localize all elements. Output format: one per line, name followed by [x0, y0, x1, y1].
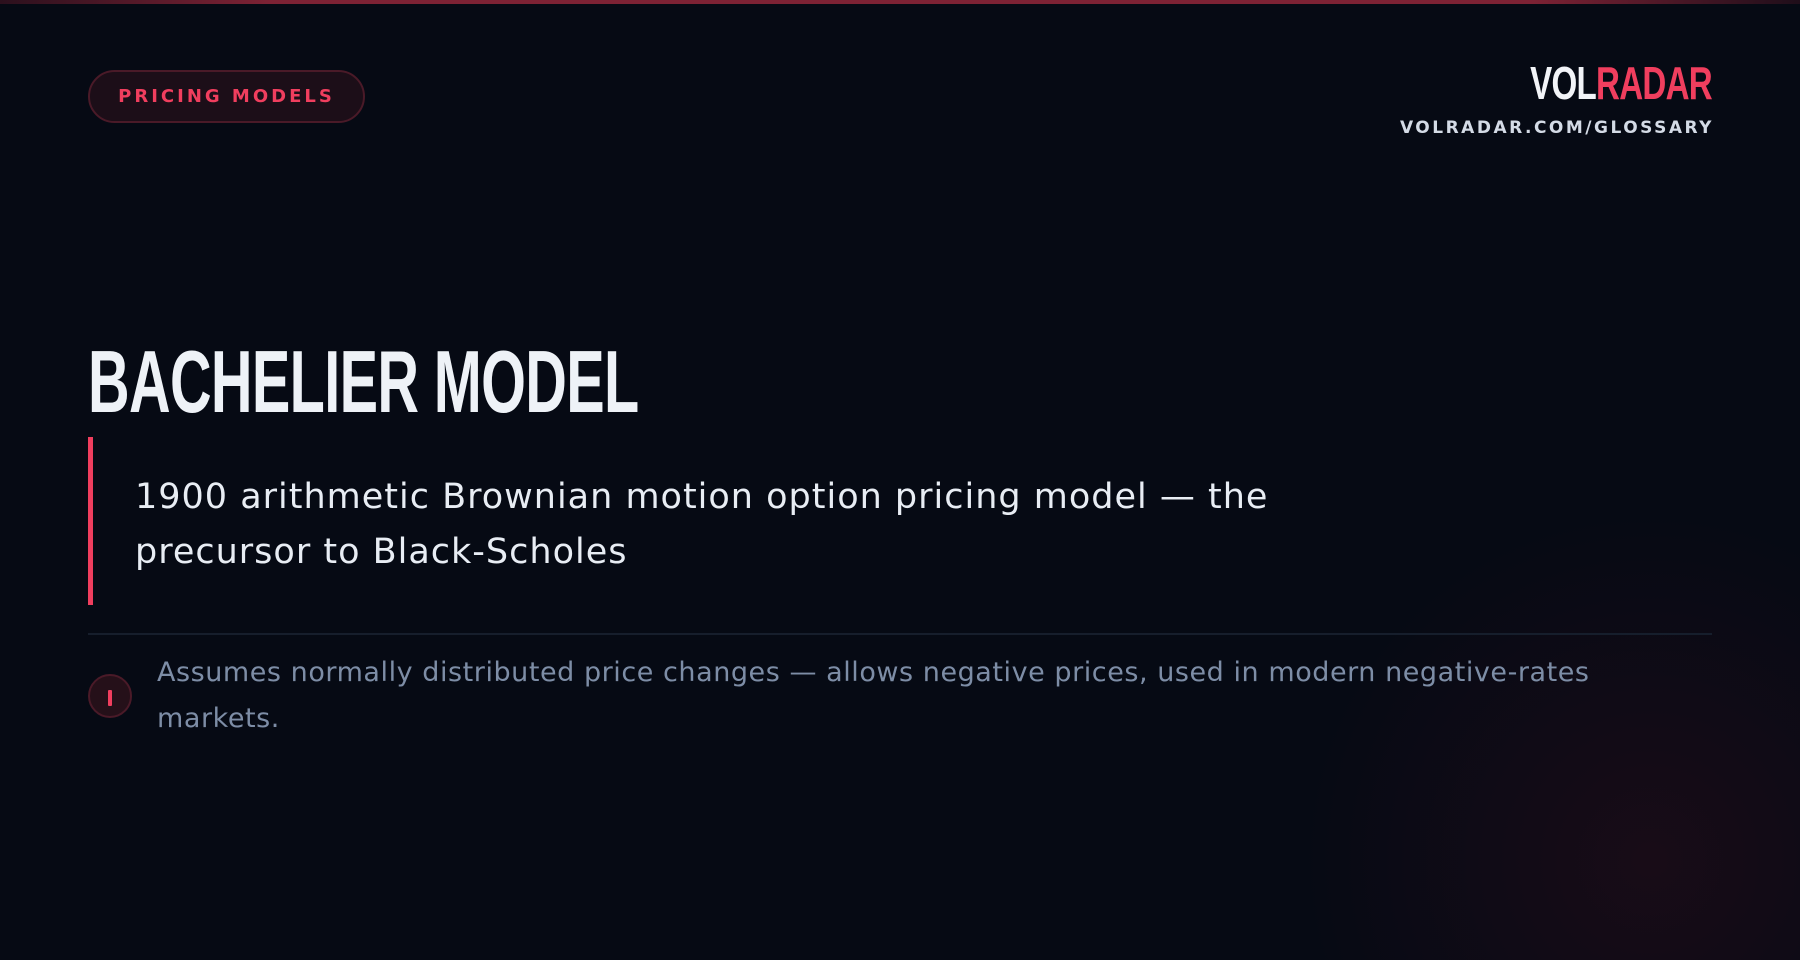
- note text: Assumes normally distributed price changes — allows negative prices, used in modern negative-rates markets.: [157, 657, 1590, 734]
- logo url: VOLRADAR.COM/GLOSSARY: [1400, 118, 1714, 138]
- badge: category: PRICING MODELS: [118, 86, 335, 107]
- title: BACHELIER MODEL: [88, 332, 639, 431]
- badge: category: [88, 70, 365, 123]
- logo block: [1400, 57, 1714, 138]
- definition quote: 1900 arithmetic Brownian motion option pricing model — the precursor to Black-Scholes: [135, 477, 1268, 572]
- icon: info: [88, 674, 132, 718]
- note callout: [88, 657, 1590, 734]
- logo wordmark: VOLRADAR: [1530, 57, 1712, 109]
- definition quote: [88, 437, 1388, 605]
